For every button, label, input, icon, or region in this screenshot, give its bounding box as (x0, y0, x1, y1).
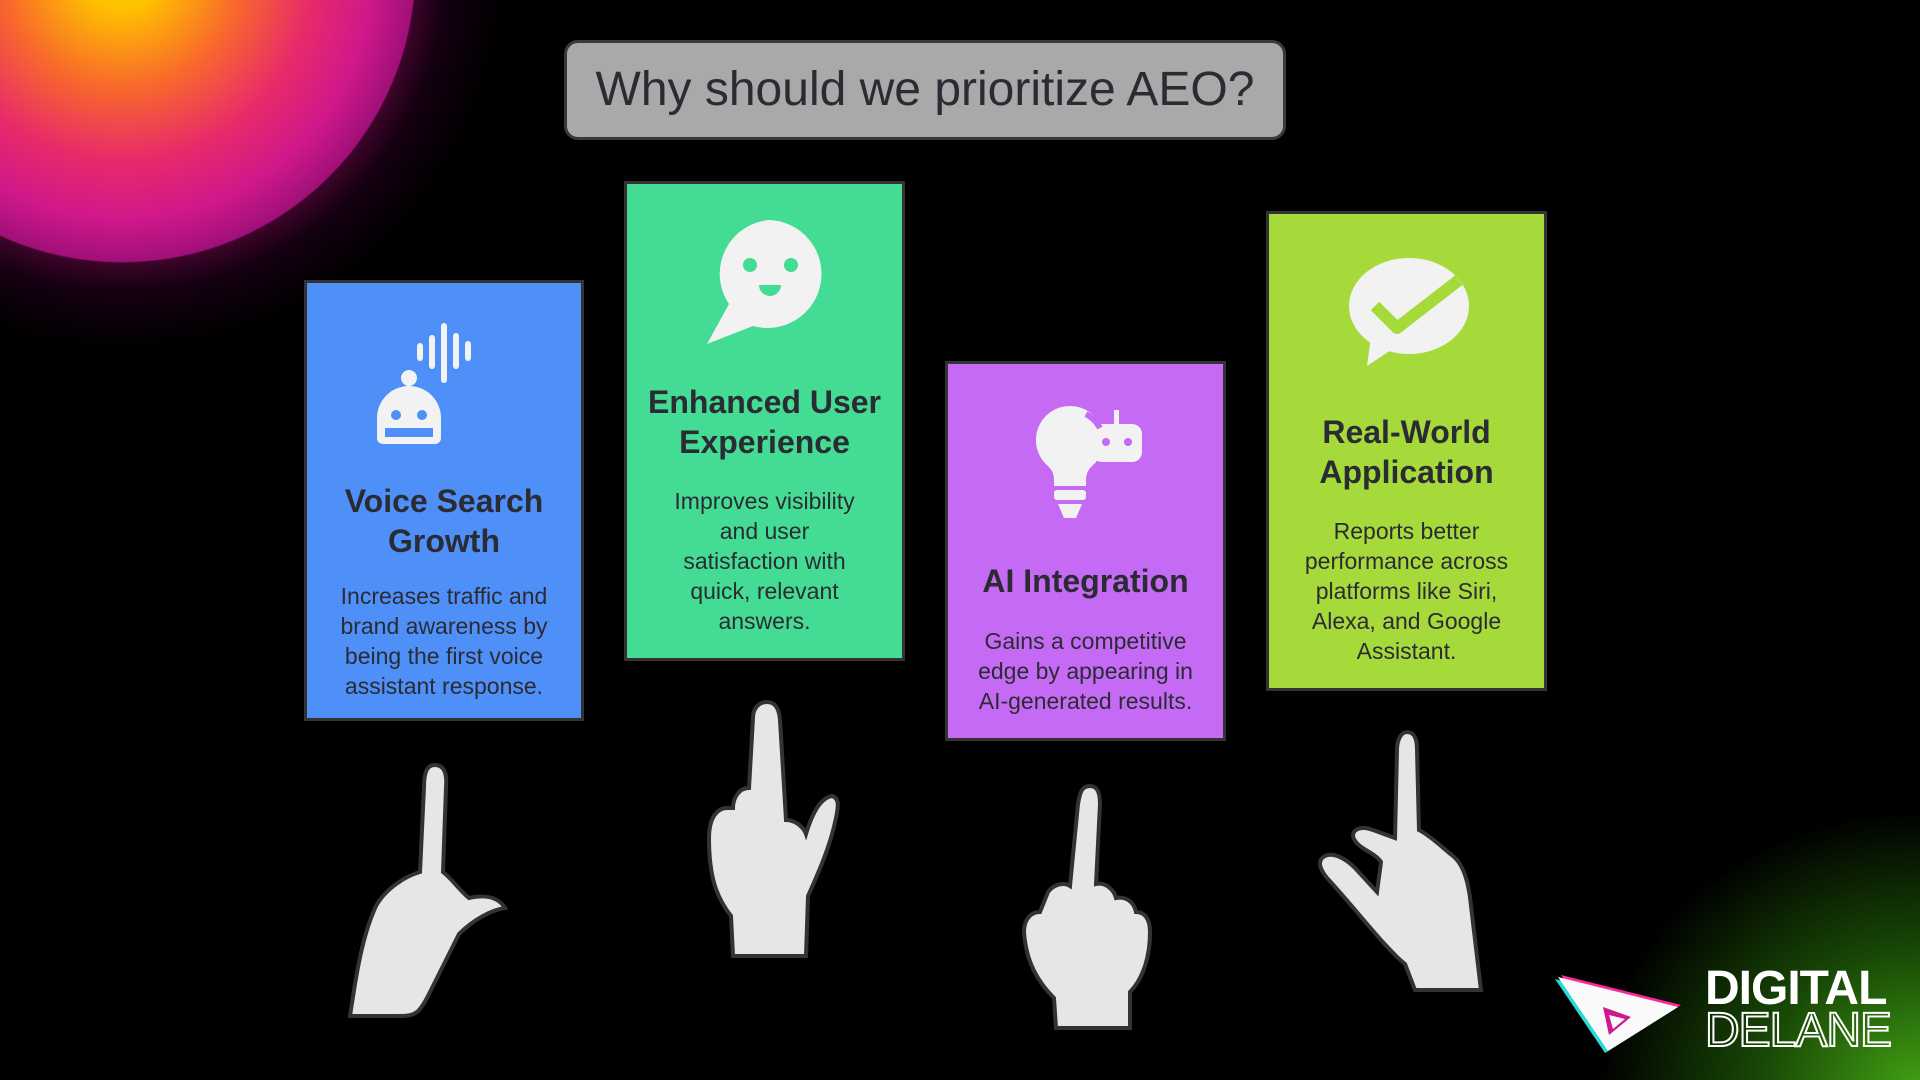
panel: voice search growth (304, 280, 584, 721)
icon: robot voice (377, 323, 471, 444)
panel: ai integration: Gains a competitive edge by appearing in AI-generated results. (978, 628, 1193, 714)
logo text: DIGITAL (1705, 962, 1886, 1015)
icon: pointing hand 3 (1022, 784, 1152, 1030)
title (564, 40, 1286, 140)
panel: voice search growth: Increases traffic and brand awareness by being the first voice assistant response. (340, 583, 548, 699)
panel: enhanced user experience: Improves visibility and user satisfaction with quick, relevant answers. (674, 488, 855, 634)
logo: digital delane (1555, 962, 1891, 1053)
panel: voice search growth: Growth (388, 523, 500, 559)
icon: pointing hand 1 (348, 763, 508, 1018)
icon: smiley speech bubble (707, 220, 822, 344)
panel: ai integration (945, 361, 1226, 741)
panel: enhanced user experience (624, 181, 905, 661)
panel: real-world application: Real-World (1322, 414, 1491, 450)
panel: real-world application: Application (1319, 454, 1494, 490)
panel: enhanced user experience: Enhanced User (648, 384, 881, 420)
icon: lightbulb robot (1036, 406, 1142, 518)
panel: voice search growth: Voice Search (345, 483, 543, 519)
icon: logo triangle (1555, 975, 1681, 1053)
panel: ai integration: AI Integration (982, 563, 1189, 599)
icon: pointing hand 4 (1318, 730, 1484, 992)
panel: real-world application: Reports better performance across platforms like Siri, Alexa, and Google Assistant. (1305, 518, 1508, 664)
title: Why should we prioritize AEO? (596, 63, 1254, 116)
panel: real-world application (1266, 211, 1547, 691)
panel: enhanced user experience: Experience (679, 424, 850, 460)
icon: check speech bubble (1349, 258, 1469, 366)
icon: pointing hand 2 (707, 700, 840, 958)
